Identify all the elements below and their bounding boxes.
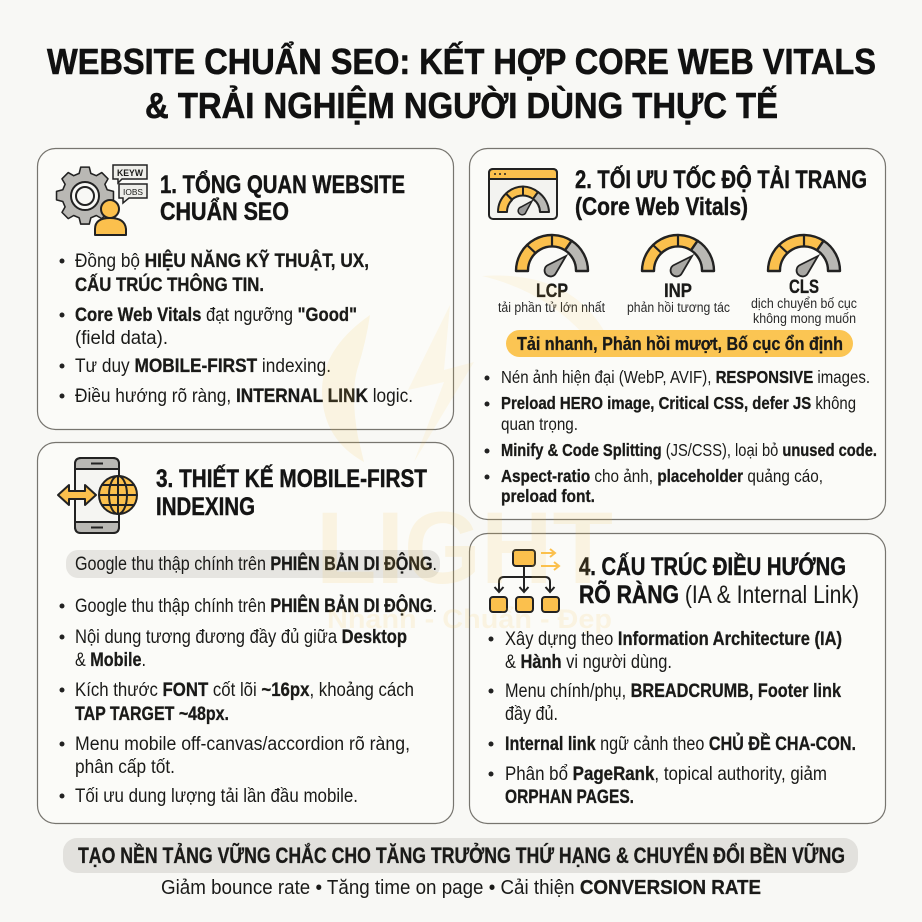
heading: panel 4 bbox=[579, 551, 859, 609]
title: & TRẢI NGHIỆM NGƯỜI DÙNG THỰC TẾ bbox=[145, 84, 778, 126]
text block: panel 2 bullets: quan trọng. bbox=[501, 414, 578, 434]
text block: panel 3 bullets: & Mobile. bbox=[75, 650, 146, 671]
text block: panel 4 bullets: Menu chính/phụ, BREADCRUMB, Footer link bbox=[505, 681, 841, 702]
text block: panel 4 bullets: Phân bổ PageRank, topical authority, giảm bbox=[505, 764, 827, 785]
watermark: LIGHT logo: LIGHT bbox=[316, 491, 613, 605]
icon: browser window with gauge bbox=[489, 169, 557, 219]
heading: panel 2: (Core Web Vitals) bbox=[575, 193, 748, 221]
text block: panel 3 bullets: Tối ưu dung lượng tải lần đầu mobile. bbox=[75, 786, 358, 807]
gauge: CLS: dịch chuyển bố cục bbox=[751, 296, 857, 311]
heading: panel 2 bbox=[575, 164, 867, 221]
text block: panel 2 bullets: Nén ảnh hiện đại (WebP, AVIF), RESPONSIVE images. bbox=[501, 367, 870, 387]
gauge: INP bbox=[627, 235, 730, 315]
icon: gear with user and keyword bubbles: IOBS bbox=[123, 187, 143, 197]
text block: panel 1 bullets: Core Web Vitals đạt ngưỡng "Good" bbox=[75, 305, 357, 326]
gauge: LCP bbox=[498, 235, 605, 315]
footer banner bbox=[63, 838, 858, 873]
text block: panel 2 bullets: Preload HERO image, Critical CSS, defer JS không bbox=[501, 393, 856, 413]
heading: panel 3: INDEXING bbox=[156, 493, 255, 521]
text block: panel 4 bullets bbox=[488, 629, 856, 808]
text block: panel 3 bullets: Google thu thập chính trên PHIÊN BẢN DI ĐỘNG. bbox=[75, 595, 437, 617]
gauge: LCP: LCP bbox=[536, 281, 568, 302]
gauge: CLS bbox=[751, 235, 857, 326]
panel: 1 overview bbox=[38, 148, 454, 430]
callout: mobile crawl note: Google thu thập chính trên PHIÊN BẢN DI ĐỘNG. bbox=[75, 553, 437, 575]
text block: panel 4 bullets: ORPHAN PAGES. bbox=[505, 787, 634, 808]
text block: panel 3 bullets bbox=[60, 595, 437, 807]
gauge: CLS: CLS bbox=[789, 277, 819, 298]
heading: panel 1: CHUẨN SEO bbox=[160, 197, 289, 226]
heading: panel 3 bbox=[156, 464, 427, 521]
text block: panel 4 bullets: Internal link ngữ cảnh theo CHỦ ĐỀ CHA-CON. bbox=[505, 733, 856, 755]
icon: phone, globe and arrows bbox=[58, 458, 137, 533]
icon: gear with user and keyword bubbles: KEYW bbox=[117, 168, 143, 178]
gauge: CLS: không mong muốn bbox=[753, 311, 856, 326]
text block: panel 1 bullets: Điều hướng rõ ràng, INTERNAL LINK logic. bbox=[75, 386, 413, 407]
text block: panel 1 bullets: (field data). bbox=[75, 328, 168, 349]
heading: panel 3: 3. THIẾT KẾ MOBILE-FIRST bbox=[156, 464, 427, 493]
text block: panel 2 bullets: Aspect-ratio cho ảnh, placeholder quảng cáo, bbox=[501, 466, 823, 486]
text block: panel 4 bullets: Xây dựng theo Information Architecture (IA) bbox=[505, 629, 842, 650]
heading: panel 1 bbox=[160, 169, 405, 226]
text block: panel 3 bullets: Nội dung tương đương đầy đủ giữa Desktop bbox=[75, 627, 407, 648]
callout: speed summary bbox=[506, 330, 853, 357]
icon: gear with user and keyword bubbles bbox=[57, 165, 147, 235]
text block: panel 2 bullets: preload font. bbox=[501, 486, 595, 506]
title bbox=[47, 40, 876, 126]
text block: panel 3 bullets: TAP TARGET ~48px. bbox=[75, 704, 229, 725]
panel: 2 page speed bbox=[470, 148, 886, 520]
text block: panel 1 bullets: Đồng bộ HIỆU NĂNG KỸ THUẬT, UX, bbox=[75, 250, 369, 272]
watermark: LIGHT logo bbox=[316, 276, 613, 634]
text block: panel 1 bullets: Tư duy MOBILE-FIRST indexing. bbox=[75, 356, 331, 377]
text block: panel 3 bullets: Kích thước FONT cốt lõi ~16px, khoảng cách bbox=[75, 680, 414, 701]
heading: panel 4: RÕ RÀNG (IA & Internal Link) bbox=[579, 579, 859, 609]
text block: panel 4 bullets: đầy đủ. bbox=[505, 704, 558, 725]
footer benefits line: Giảm bounce rate • Tăng time on page • Cải thiện CONVERSION RATE bbox=[161, 877, 761, 899]
text block: panel 3 bullets: Menu mobile off-canvas/accordion rõ ràng, bbox=[75, 734, 410, 755]
text block: panel 2 bullets bbox=[484, 367, 877, 506]
text block: panel 3 bullets: phân cấp tốt. bbox=[75, 757, 175, 778]
watermark: LIGHT logo: Nhanh - Chuẩn - Đẹp bbox=[327, 604, 612, 634]
panel: 3 mobile first bbox=[38, 442, 454, 824]
heading: panel 4: 4. CẤU TRÚC ĐIỀU HƯỚNG bbox=[579, 551, 846, 581]
text block: panel 1 bullets bbox=[60, 250, 413, 407]
text block: panel 1 bullets: CẤU TRÚC THÔNG TIN. bbox=[75, 274, 264, 296]
text block: panel 4 bullets: & Hành vi người dùng. bbox=[505, 652, 672, 673]
icon: site hierarchy tree bbox=[490, 549, 559, 612]
gauge: INP: INP bbox=[664, 281, 692, 302]
callout: speed summary: Tải nhanh, Phản hồi mượt, Bố cục ổn định bbox=[517, 334, 843, 354]
gauge: LCP: tải phần tử lớn nhất bbox=[498, 300, 605, 315]
text block: panel 2 bullets: Minify & Code Splitting (JS/CSS), loại bỏ unused code. bbox=[501, 440, 877, 460]
gauge: INP: phản hồi tương tác bbox=[627, 300, 730, 315]
panel: 4 navigation structure bbox=[470, 534, 886, 824]
heading: panel 1: 1. TỔNG QUAN WEBSITE bbox=[160, 169, 405, 199]
